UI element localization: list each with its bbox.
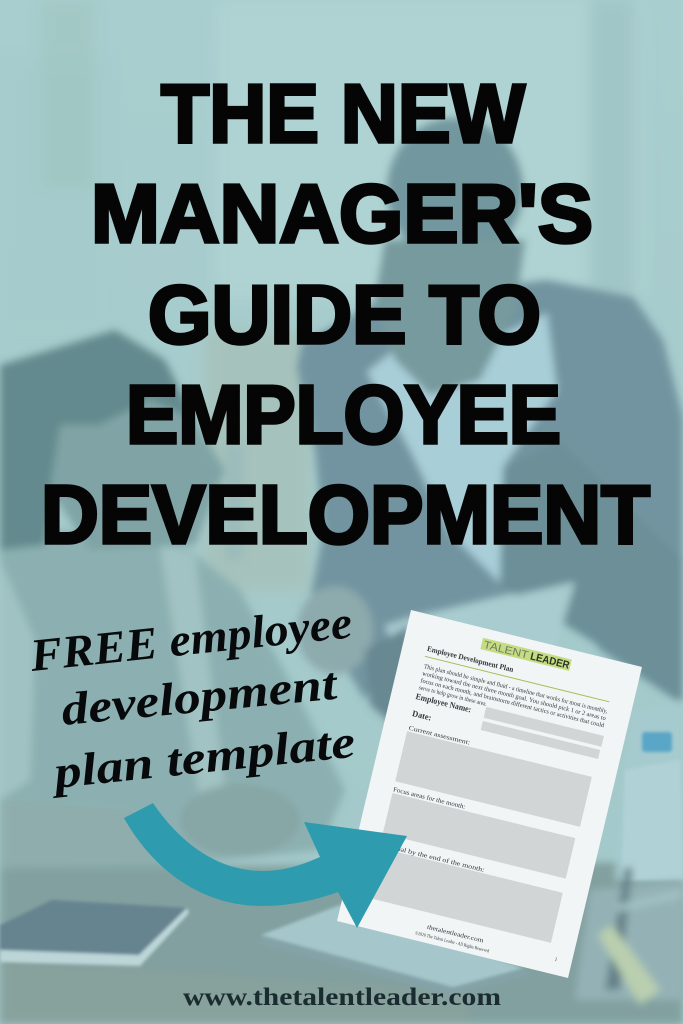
document logo: LEADER <box>529 651 571 672</box>
document intro text: serve to help grow in these area. <box>418 684 488 708</box>
notebook <box>0 900 187 957</box>
callout: free template: plan template <box>47 716 357 798</box>
callout: free template <box>27 596 357 798</box>
document footer <box>414 921 559 971</box>
standing woman jacket <box>297 280 683 705</box>
document footer: 1 <box>554 957 558 963</box>
title: DEVELOPMENT <box>41 468 650 561</box>
hands and papers <box>297 586 373 674</box>
callout: free template: development <box>59 658 340 735</box>
document field labels: Employee Name: <box>415 691 473 715</box>
title: THE NEW <box>161 67 526 160</box>
callout: free template: FREE employee <box>27 596 354 681</box>
document intro text: This plan should be simple and fluid - a timeline that works for most is monthly, <box>423 663 609 715</box>
document intro text: focus on each month, and brainstorm different tactics or activities that could <box>420 677 606 730</box>
title: EMPLOYEE <box>126 368 561 461</box>
beige wall behind seated woman <box>205 330 310 590</box>
document intro text: working toward the next three month goal. You should pick 1 or 2 areas to <box>421 670 607 722</box>
water bottle <box>622 760 683 880</box>
document heading: Employee Development Plan <box>426 644 515 674</box>
standing woman shirt <box>367 313 557 583</box>
document footer: ©2020 The Talent Leader - All Rights Reserved <box>414 930 490 955</box>
standing woman hair and face <box>387 118 523 262</box>
document intro text <box>418 663 609 737</box>
document logo <box>480 638 572 672</box>
seated woman hair <box>0 330 195 550</box>
website url: www.thetalentleader.com <box>183 984 501 1011</box>
title: MANAGER'S <box>91 167 593 260</box>
document logo: TALENT <box>482 640 530 662</box>
template document preview <box>337 610 642 978</box>
arrow <box>124 803 407 928</box>
desk <box>0 862 683 1024</box>
title <box>41 67 650 561</box>
document field labels <box>379 691 521 874</box>
laptop <box>261 905 523 987</box>
seated woman face <box>50 400 225 550</box>
document field labels: Date: <box>411 708 433 723</box>
title: GUIDE TO <box>148 268 541 361</box>
document footer: thetalentleader.com <box>426 924 484 945</box>
seated woman body <box>0 530 345 870</box>
document field labels: My goal by the end of the month: <box>379 841 485 874</box>
document field labels: Focus areas for the month: <box>392 786 466 811</box>
document field labels: Current assessment: <box>408 725 471 747</box>
document form fields <box>368 690 604 944</box>
pen cup <box>575 880 683 1000</box>
